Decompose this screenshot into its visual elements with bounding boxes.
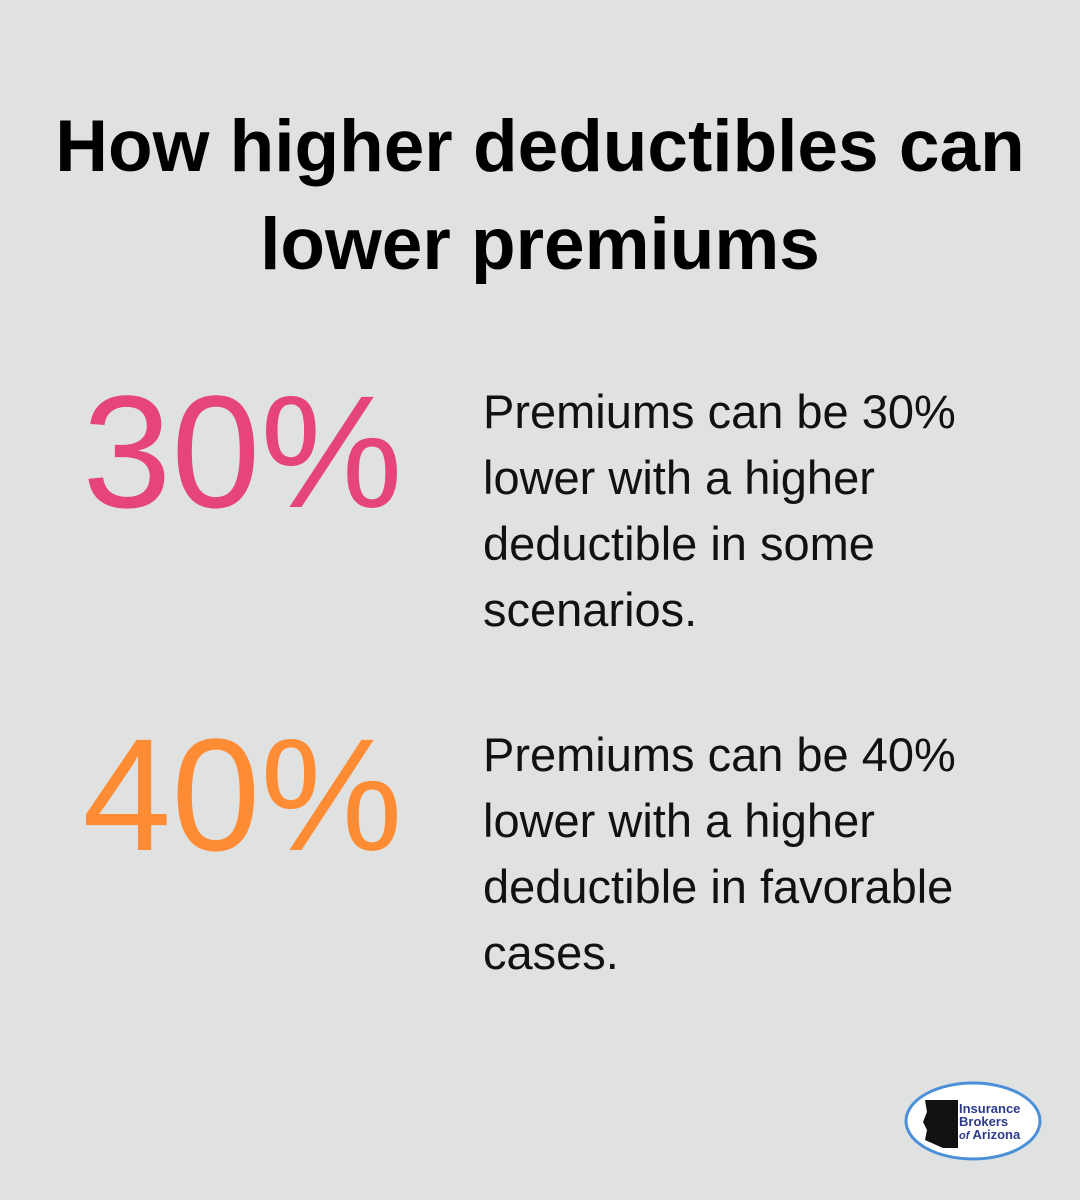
stat: 40%: 40% bbox=[82, 705, 403, 884]
title: lower premiums bbox=[260, 204, 820, 285]
logo: Insurance bbox=[959, 1101, 1020, 1116]
text: 40% description: Premiums can be 40% lower with a higher deductible in favorable cases. bbox=[483, 728, 956, 979]
text: 30% description: Premiums can be 30% lower with a higher deductible in some scenarios. bbox=[483, 385, 956, 636]
title: How higher deductibles can bbox=[55, 106, 1025, 187]
title bbox=[55, 106, 1025, 285]
logo: of Arizona bbox=[959, 1127, 1021, 1142]
logo bbox=[904, 1082, 1042, 1160]
stat: 30%: 30% bbox=[82, 362, 403, 541]
logo: Brokers bbox=[959, 1114, 1008, 1129]
